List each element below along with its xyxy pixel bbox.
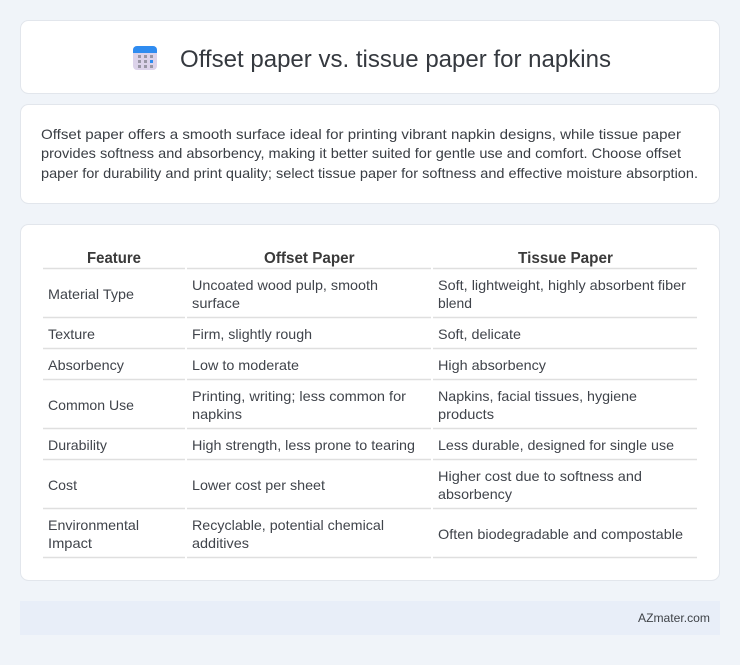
row: texture — [48, 326, 521, 342]
row: cost: Lower cost per sheet — [192, 477, 325, 493]
panel: introduction — [20, 104, 720, 204]
row: durability: High strength, less prone to tearing — [192, 437, 415, 453]
row: material type: Material Type — [48, 286, 134, 302]
icon: calendar — [133, 46, 157, 70]
row: absorbency: High absorbency — [438, 357, 546, 373]
row: environmental impact: Impact — [48, 535, 92, 551]
row: common use: Common Use — [48, 397, 134, 413]
row: texture: Soft, delicate — [438, 326, 521, 342]
row: material type: Uncoated wood pulp, smooth — [192, 277, 378, 293]
row: common use: napkins — [192, 406, 242, 422]
table header row: Tissue Paper — [518, 250, 613, 267]
row: absorbency: Absorbency — [48, 357, 124, 373]
row: material type: blend — [438, 295, 472, 311]
row: durability: Less durable, designed for single use — [438, 437, 674, 453]
row: common use: Printing, writing; less common for — [192, 388, 406, 404]
row: environmental impact: Environmental — [48, 517, 139, 533]
text block: summary: provides softness and absorbency, making it better suited for gentle use and comfort. Choose offset — [41, 145, 681, 161]
row: environmental impact — [48, 517, 683, 551]
table header row: Feature — [87, 250, 141, 267]
row: cost: Higher cost due to softness and — [438, 468, 642, 484]
row: absorbency: Low to moderate — [192, 357, 299, 373]
row: common use: products — [438, 406, 494, 422]
title: Offset paper vs. tissue paper for napkins — [180, 46, 611, 73]
row: durability — [48, 437, 674, 453]
row: texture: Firm, slightly rough — [192, 326, 312, 342]
row: material type: Soft, lightweight, highly absorbent fiber — [438, 277, 686, 293]
row: material type — [48, 277, 686, 311]
row: absorbency — [48, 357, 546, 373]
panel: title header — [20, 20, 720, 94]
row: common use — [48, 388, 637, 422]
row: cost: Cost — [48, 477, 77, 493]
text block: summary — [41, 126, 698, 181]
text block: summary: paper for durability and print quality; select tissue paper for softness and effective moisture absorption. — [41, 165, 698, 181]
text block: summary: Offset paper offers a smooth surface ideal for printing vibrant napkin designs, while tissue paper — [41, 126, 681, 142]
row: environmental impact: additives — [192, 535, 249, 551]
row: environmental impact: Often biodegradable and compostable — [438, 526, 683, 542]
row: cost — [48, 468, 642, 502]
row: texture: Texture — [48, 326, 95, 342]
row: material type: surface — [192, 295, 240, 311]
row: durability: Durability — [48, 437, 107, 453]
table header row — [87, 250, 613, 267]
row: cost: absorbency — [438, 486, 512, 502]
footer — [20, 601, 720, 635]
row: common use: Napkins, facial tissues, hygiene — [438, 388, 637, 404]
row: environmental impact: Recyclable, potential chemical — [192, 517, 384, 533]
footer: AZmater.com — [638, 611, 710, 625]
table header row: Offset Paper — [264, 250, 354, 267]
panel: comparison table — [20, 224, 720, 580]
